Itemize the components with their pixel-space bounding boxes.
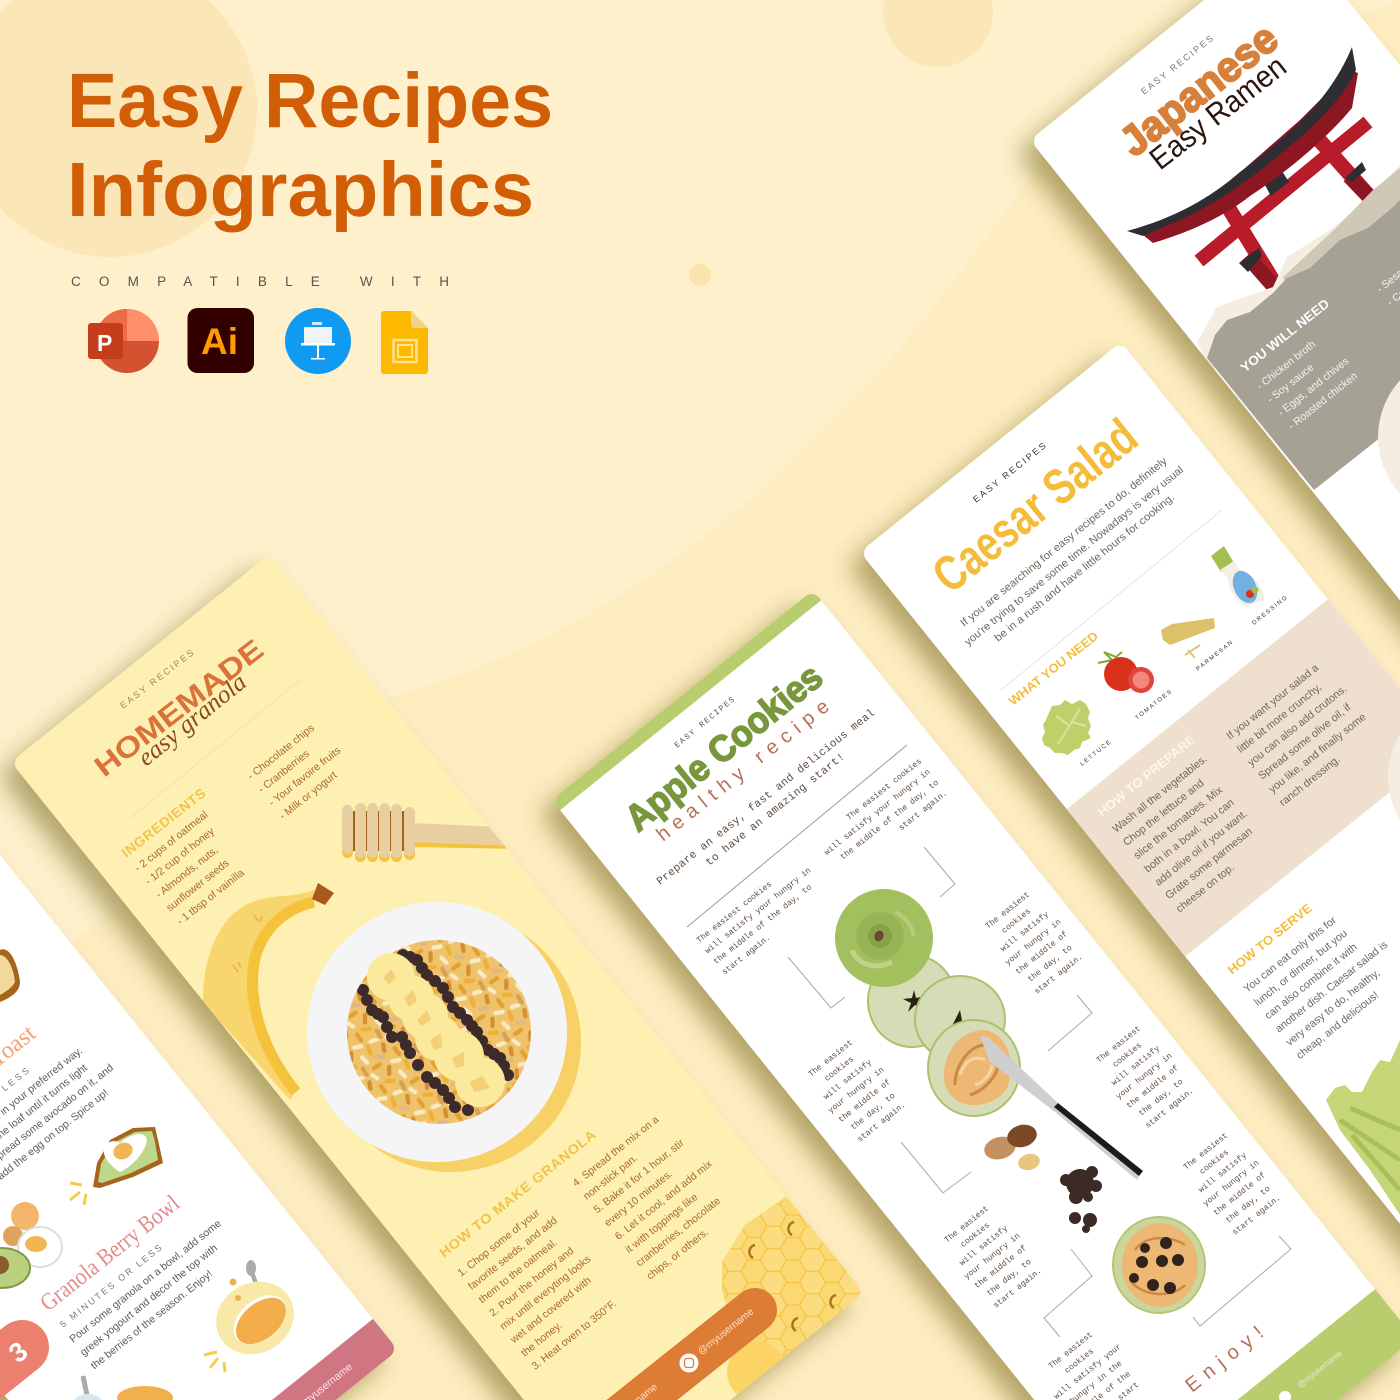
banana — [203, 883, 334, 1100]
how to serve text: lunch, or dinner, but you — [1252, 928, 1350, 1009]
apple heading: healthy recipe — [652, 695, 834, 846]
how to make left column: mix until everyting looks — [498, 1253, 593, 1333]
note 4: will satisfy — [822, 1057, 874, 1102]
berry bowl text: Pour some granola on a bowl, add some — [67, 1217, 224, 1345]
title: Infographics — [67, 147, 534, 233]
granola heading: HOMEMADE — [89, 634, 270, 784]
how to prepare left column: Chop the lettuce and — [1121, 777, 1206, 849]
torii gate — [1127, 47, 1374, 290]
compatible with label: COMPATIBLE WITH — [71, 274, 449, 289]
note 7: start again. — [1230, 1193, 1283, 1238]
ingredients left list: sunflower seeds — [164, 857, 232, 914]
note 4: start again. — [855, 1100, 908, 1145]
ramen ingredients text: YOU WILL NEED — [1238, 296, 1332, 375]
note 6 — [937, 1199, 1048, 1314]
how to prepare left column: both in a bowl. You can — [1142, 797, 1237, 875]
ingredient labels — [1080, 594, 1290, 768]
apple footer text — [1279, 1348, 1344, 1400]
how to make left column: wet and covered with — [508, 1274, 594, 1346]
granola heading: easy granola — [133, 669, 252, 772]
title: Easy Recipes — [67, 58, 553, 144]
ingredient labels: LETTUCE — [1080, 739, 1113, 768]
how to prepare left column: Grate some parmesan — [1163, 826, 1255, 902]
ramen heading: EASY RECIPES — [1139, 31, 1217, 97]
icon: tomatoes — [1098, 652, 1154, 693]
ingredients right list: - Cranberries — [256, 748, 312, 796]
note 4: cookies — [823, 1054, 856, 1084]
note 5: the day, to — [1137, 1077, 1185, 1118]
note 6: the day, to — [985, 1257, 1033, 1298]
ingredients right list: - Your favoire fruits — [267, 745, 343, 809]
ramen heading: Easy Ramen — [1143, 49, 1293, 177]
note 7: the day, to — [1224, 1184, 1272, 1225]
how to make right column: it with toppings like — [623, 1191, 700, 1256]
apple slices — [868, 955, 1020, 1116]
social pill: @myusername — [696, 1306, 756, 1357]
note 3: the day, to — [1026, 943, 1074, 984]
how to make left column: 1. Chop some of your — [455, 1207, 543, 1279]
ramen ingredients panel — [1197, 165, 1400, 490]
note 1: The easiest cookies — [695, 879, 774, 945]
whole apple — [835, 889, 933, 987]
how to make right column: 5. Bake it for 1 hour, stir — [592, 1137, 687, 1216]
apple card background — [552, 590, 1400, 1400]
big lettuce — [1326, 1040, 1400, 1215]
ramen heading: Japanese — [1111, 14, 1286, 165]
note 6: The easiest — [942, 1204, 991, 1245]
icon: avocado toast — [70, 1127, 163, 1205]
note 4: The easiest — [806, 1038, 855, 1079]
number 3 badge — [0, 1336, 33, 1400]
how to prepare left column: add olive oil if you want. — [1153, 808, 1250, 889]
how to make right column: non-stick pan. — [581, 1152, 640, 1203]
apple tagline: Prepare an easy, fast and delicious meal — [655, 708, 878, 888]
how to make right column: 4. Spread the mix on a — [570, 1114, 661, 1189]
berry card background — [0, 610, 398, 1400]
ramen ingredients text: - Roasted chicken — [1286, 370, 1360, 432]
social pill — [540, 1306, 756, 1400]
note 7: cookies — [1198, 1147, 1231, 1177]
knife — [980, 1036, 1143, 1180]
ramen card background — [1030, 0, 1400, 880]
note 2: the middle of the day, to — [838, 778, 941, 862]
note 7: The easiest — [1181, 1131, 1230, 1172]
card: Caesar Salad — [860, 342, 1400, 1292]
note 3 — [978, 885, 1089, 1000]
icon: dressing bottle — [1211, 546, 1264, 607]
cookie bowl — [1113, 1217, 1205, 1313]
card: Homemade Granola — [11, 554, 875, 1400]
note 2: The easiest cookies — [845, 756, 924, 822]
ramen ingredients text: - Chicken broth — [1254, 338, 1318, 392]
apple heading: EASY RECIPES — [673, 696, 737, 750]
note 8: will satisfy your — [1052, 1342, 1124, 1400]
icon: Keynote — [285, 308, 351, 374]
ingredients left list: - 1/2 cup of honey — [143, 825, 217, 888]
how to make right column — [570, 1104, 747, 1282]
granola card background — [11, 554, 864, 1400]
note 6: will satisfy — [958, 1223, 1010, 1268]
chocolate chips — [1060, 1166, 1102, 1233]
peanut — [982, 1121, 1042, 1173]
salad introduction: you're trying to save some time. Nowadays is very usual — [962, 464, 1186, 648]
apple heading: Apple Cookies — [617, 656, 830, 839]
how to make right column: chips, or others. — [644, 1226, 711, 1282]
salad introduction: If you are searching for easy recipes to do, definitely — [958, 455, 1170, 629]
ingredients right list: - Chocolate chips — [245, 722, 317, 782]
salad heading: EASY RECIPES — [971, 439, 1050, 505]
how to serve text: another dish. Caesar salad is — [1273, 938, 1391, 1035]
salad introduction: be in a rush and have little hours for cooking. — [992, 492, 1177, 644]
banana slices — [367, 953, 505, 1107]
note 8 — [1035, 1320, 1149, 1400]
how to prepare left column: cheese on top. — [1174, 862, 1237, 915]
note 3: the middle of — [1014, 929, 1070, 977]
how to prepare right column: Spread some olive oil, if — [1256, 701, 1354, 782]
ramen ingredients text: - Eggs, and chives — [1276, 355, 1351, 419]
how to prepare right column — [1224, 656, 1381, 809]
ingredient labels: TOMATOES — [1135, 688, 1174, 722]
how to prepare heading: HOW TO PREPARE — [1095, 732, 1198, 819]
bottom icons — [74, 1376, 173, 1400]
callout brackets — [788, 847, 1291, 1337]
icon: eggs and avocado — [0, 1202, 62, 1288]
ingredients right list: - Milk or yogurt — [277, 769, 339, 822]
how to make left column: 3. Heat oven to 350°F. — [529, 1298, 619, 1372]
berry bowl text: greek yogourt and decor the top with — [78, 1242, 220, 1359]
ingredients left list: - Almonds, nuts, — [154, 844, 220, 901]
card: Japanese Easy Ramen — [1010, 0, 1400, 652]
note 5: start again. — [1143, 1086, 1196, 1131]
how to make left column: the honey. — [519, 1319, 564, 1359]
note 7 — [1176, 1126, 1287, 1241]
note 3: will satisfy — [999, 909, 1051, 954]
note 3: start again. — [1032, 952, 1085, 997]
apple footer text: @myusername — [1296, 1348, 1344, 1390]
icon: Illustrator — [188, 308, 254, 373]
how to serve text: can also combine it with — [1263, 941, 1360, 1022]
icon: Google Slides — [381, 311, 428, 374]
note 8: cookies — [1063, 1346, 1096, 1376]
how to serve heading: HOW TO SERVE — [1225, 901, 1315, 977]
salad card background — [860, 342, 1400, 1292]
how to make left column: 2. Pour the honey and — [487, 1245, 576, 1319]
icon: parmesan — [1161, 618, 1215, 658]
ingredients left list — [132, 809, 253, 928]
note 2: will satisfy your hungry in — [822, 767, 932, 858]
ingredient labels: DRESSING — [1252, 594, 1290, 627]
berry bowl heading: Granola Berry Bowl — [36, 1190, 185, 1317]
note 3: cookies — [1000, 906, 1033, 936]
card: Apple Cookies — [552, 590, 1400, 1400]
note 5: the middle of — [1125, 1063, 1181, 1111]
note 3: your hungry in — [1003, 917, 1063, 968]
note 2: start again. — [897, 788, 949, 833]
how to make right column: 6. Let it cool, and add mix — [613, 1158, 715, 1243]
how to make left column: them to the oatmeal. — [477, 1236, 560, 1306]
title — [67, 58, 553, 233]
how to serve text: You can eat only this for — [1241, 914, 1339, 995]
how to make heading: HOW TO MAKE GRANOLA — [437, 1127, 599, 1260]
how to prepare left column: slice the tomatoes. Mix — [1132, 784, 1225, 862]
note 6: start again. — [991, 1266, 1044, 1311]
ingredient labels: PARMESAN — [1196, 639, 1235, 673]
granola heading: EASY RECIPES — [118, 646, 198, 711]
how to prepare right column: ranch dressing. — [1277, 754, 1343, 809]
decorative cream circles — [1378, 353, 1400, 861]
how to serve text: cheap, and delicious! — [1294, 989, 1381, 1062]
icon: PowerPoint: P — [97, 330, 112, 356]
how to make right column: every 10 minutes. — [602, 1168, 675, 1229]
ingredients right list — [245, 718, 354, 822]
note 2 — [814, 756, 949, 879]
note 1 — [695, 855, 830, 977]
how to make right column: cranberries, chocolate — [634, 1195, 723, 1269]
how to prepare left column: Wash all the vegetables. — [1110, 753, 1210, 835]
ingredients left list: - 1 tbsp of vainilla — [175, 867, 247, 928]
note 6: cookies — [959, 1220, 992, 1250]
note 5: your hungry in — [1114, 1051, 1174, 1102]
what you need heading: WHAT YOU NEED — [1006, 629, 1101, 708]
note 4: the day, to — [849, 1091, 897, 1132]
icon: PowerPoint — [88, 309, 159, 373]
note 4 — [801, 1033, 912, 1148]
ramen ingredients text — [1238, 238, 1400, 432]
honey dipper — [342, 803, 520, 862]
berry bowl time: 5 MINUTES OR LESS — [58, 1243, 164, 1330]
note 7: the middle of — [1212, 1170, 1268, 1218]
note 7: will satisfy — [1197, 1150, 1249, 1195]
how to make left column — [455, 1200, 625, 1373]
how to prepare right column: you can also add crutons. — [1246, 683, 1349, 769]
berry bowl text: the berries of the season. Enjoy! — [89, 1268, 215, 1372]
icon: Illustrator: Ai — [201, 321, 238, 362]
note 8: The easiest — [1046, 1330, 1095, 1371]
salad heading — [922, 408, 1148, 604]
note 5: The easiest — [1094, 1024, 1143, 1065]
note 6: the middle of — [973, 1243, 1029, 1291]
note 5 — [1089, 1019, 1200, 1134]
note 3: The easiest — [983, 890, 1032, 931]
chocolate chips on granola — [363, 955, 508, 1110]
enjoy: Enjoy! — [1181, 1322, 1268, 1397]
plate of granola — [307, 902, 581, 1172]
number 3 badge: 3 — [3, 1336, 33, 1369]
how to serve text — [1241, 899, 1400, 1062]
how to prepare right column: you like, and finally some — [1267, 711, 1369, 796]
how to make left column: favorite seeds, and add — [466, 1215, 560, 1293]
note 4: the middle of — [837, 1077, 893, 1125]
note 7: your hungry in — [1201, 1158, 1261, 1209]
note 6: your hungry in — [962, 1231, 1022, 1282]
note 1: the middle of the day, to — [712, 882, 814, 967]
how to prepare left column — [1110, 753, 1273, 915]
icon: granola bowl — [203, 1260, 307, 1372]
note 1: start again. — [720, 933, 772, 977]
note 4: your hungry in — [826, 1065, 886, 1116]
ingredients heading: INGREDIENTS — [119, 785, 209, 860]
toast icon — [0, 949, 20, 1002]
honeycomb — [722, 1197, 860, 1394]
apple tagline: to have an amazing start! — [704, 751, 848, 869]
note 1: will satisfy your hungry in — [703, 866, 813, 956]
how to serve text: very easy to do, healthy, — [1284, 967, 1382, 1049]
icon: lettuce — [1042, 700, 1091, 755]
ingredients left list: - 2 cups of oatmeal — [132, 809, 210, 874]
ramen ingredients text: - Soy sauce — [1265, 361, 1316, 406]
note 5: cookies — [1111, 1040, 1144, 1070]
how to prepare right column: little bit more crunchy, — [1235, 681, 1324, 756]
how to prepare right column: If you want your salad a — [1224, 662, 1321, 742]
card: Avocado and Berry Bowl recipes — [0, 610, 398, 1400]
note 5: will satisfy — [1110, 1043, 1162, 1088]
salad heading: Caesar Salad — [922, 408, 1148, 604]
